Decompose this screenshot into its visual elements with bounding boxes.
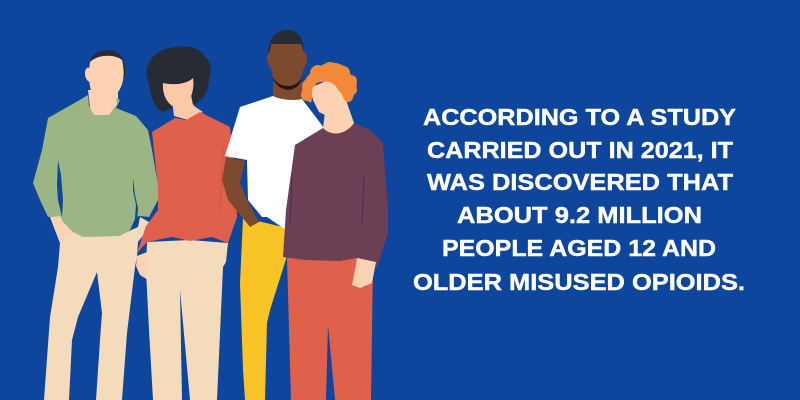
illustration: group of four people: [33, 30, 388, 400]
text block: study statement: [413, 104, 745, 295]
sweater arm gaps: [57, 160, 138, 222]
text block: study statement: OLDER MISUSED OPIOIDS.: [413, 269, 745, 295]
person: man in green sweater: [33, 50, 158, 400]
person: man in maroon sweater with red hair: [283, 62, 388, 400]
person: woman in red top: [136, 46, 237, 400]
text block: study statement: CARRIED OUT IN 2021, IT: [427, 137, 733, 163]
text block: study statement: PEOPLE AGED 12 AND: [442, 235, 716, 261]
text block: study statement: ACCORDING TO A STUDY: [423, 104, 736, 130]
text block: study statement: WAS DISCOVERED THAT: [427, 169, 733, 195]
text block: study statement: ABOUT 9.2 MILLION: [457, 202, 702, 228]
person: man in white t-shirt: [222, 30, 324, 400]
